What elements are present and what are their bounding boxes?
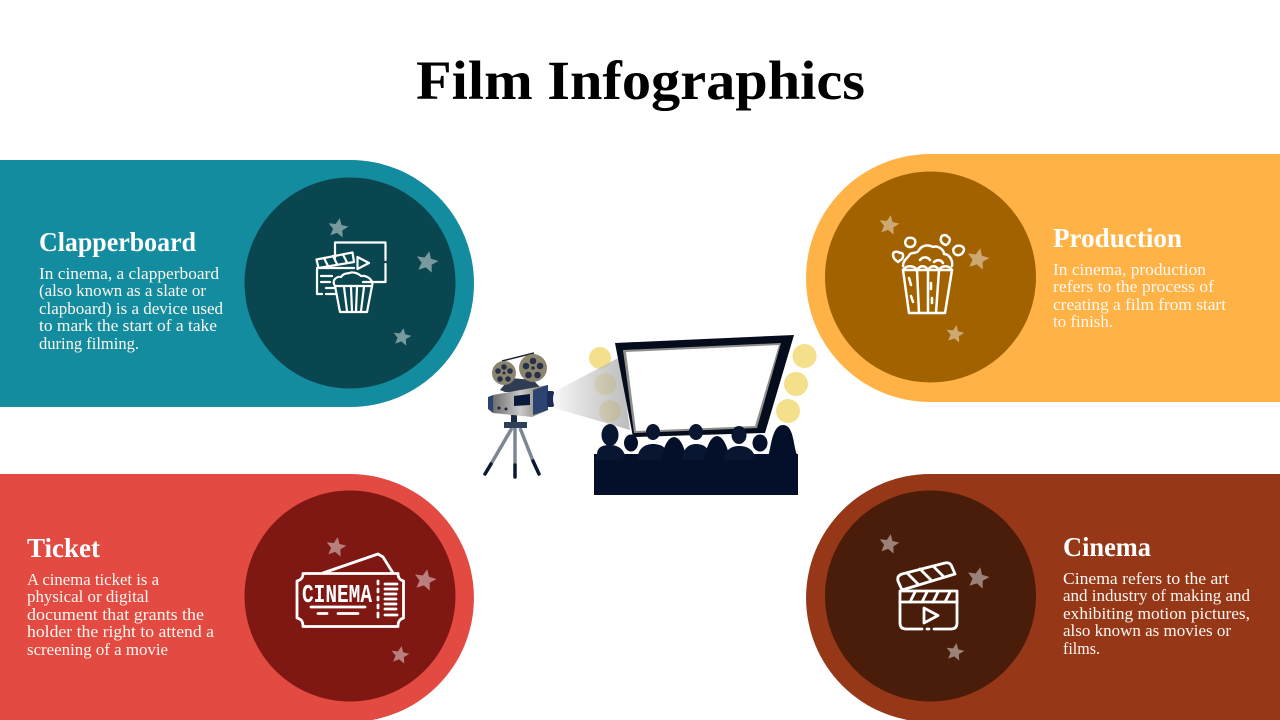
heading: production: Production [1053,223,1182,253]
stars: clapperboard [327,216,440,346]
text: clapperboard description: (also known as a slate or [39,281,207,300]
icon disc: ticket [244,490,456,702]
spotlights [589,344,816,423]
reels [502,353,534,361]
stars: cinema [878,532,991,661]
text: clapperboard description [39,264,224,353]
projector beam [554,357,630,430]
heading: clapperboard: Clapperboard [39,227,196,257]
icon: film screen, clapperboard and popcorn [316,242,386,312]
text: cinema description: films. [1063,639,1100,658]
panel: cinema [806,474,1280,720]
text: cinema description: exhibiting motion pictures, [1063,604,1250,623]
text: ticket description: A cinema ticket is a [27,570,160,589]
text: cinema description [1063,569,1251,658]
lens [533,385,548,415]
text: ticket description: document that grants the [27,605,204,624]
text: ticket description: physical or digital [27,587,149,606]
heading: cinema: Cinema [1063,532,1151,562]
panel: clapperboard [0,160,474,407]
text: production description: creating a film from start [1053,295,1226,314]
heading: ticket: Ticket [27,533,100,563]
text: ticket description: holder the right to attend a [27,622,215,641]
text: production description [1053,260,1226,331]
panel: ticket [0,474,474,720]
icon: cinema ticket [297,554,404,626]
icon disc: clapperboard [244,178,456,388]
cinema screen [615,335,794,437]
text: cinema description: also known as movies or [1063,621,1232,640]
text: clapperboard description: to mark the start of a take [39,316,217,335]
stars: ticket [325,535,438,664]
icon: cinema ticket: CINEMA [302,580,372,610]
text: cinema description: Cinema refers to the art [1063,569,1229,588]
illustration: projector and cinema audience [485,335,816,495]
panel: production [806,154,1280,402]
audience silhouettes [594,424,798,495]
icon disc: cinema [825,490,1036,702]
text: production description: to finish. [1053,312,1113,331]
icon disc: production [825,172,1036,382]
icon: popcorn [893,235,964,313]
stars: production [878,213,991,343]
tripod [485,428,539,477]
text: clapperboard description: In cinema, a clapperboard [39,264,220,283]
text: ticket description [27,570,215,659]
film projector on tripod [485,353,557,477]
text: production description: In cinema, production [1053,260,1206,279]
text: clapperboard description: clapboard) is a device used [39,299,224,318]
text: ticket description: screening of a movie [27,640,168,659]
body [493,385,548,417]
text: clapperboard description: during filming. [39,334,139,353]
title: Film Infographics [416,50,865,111]
icon: clapperboard [898,563,957,629]
text: production description: refers to the process of [1053,277,1215,296]
text: cinema description: and industry of making and [1063,586,1251,605]
